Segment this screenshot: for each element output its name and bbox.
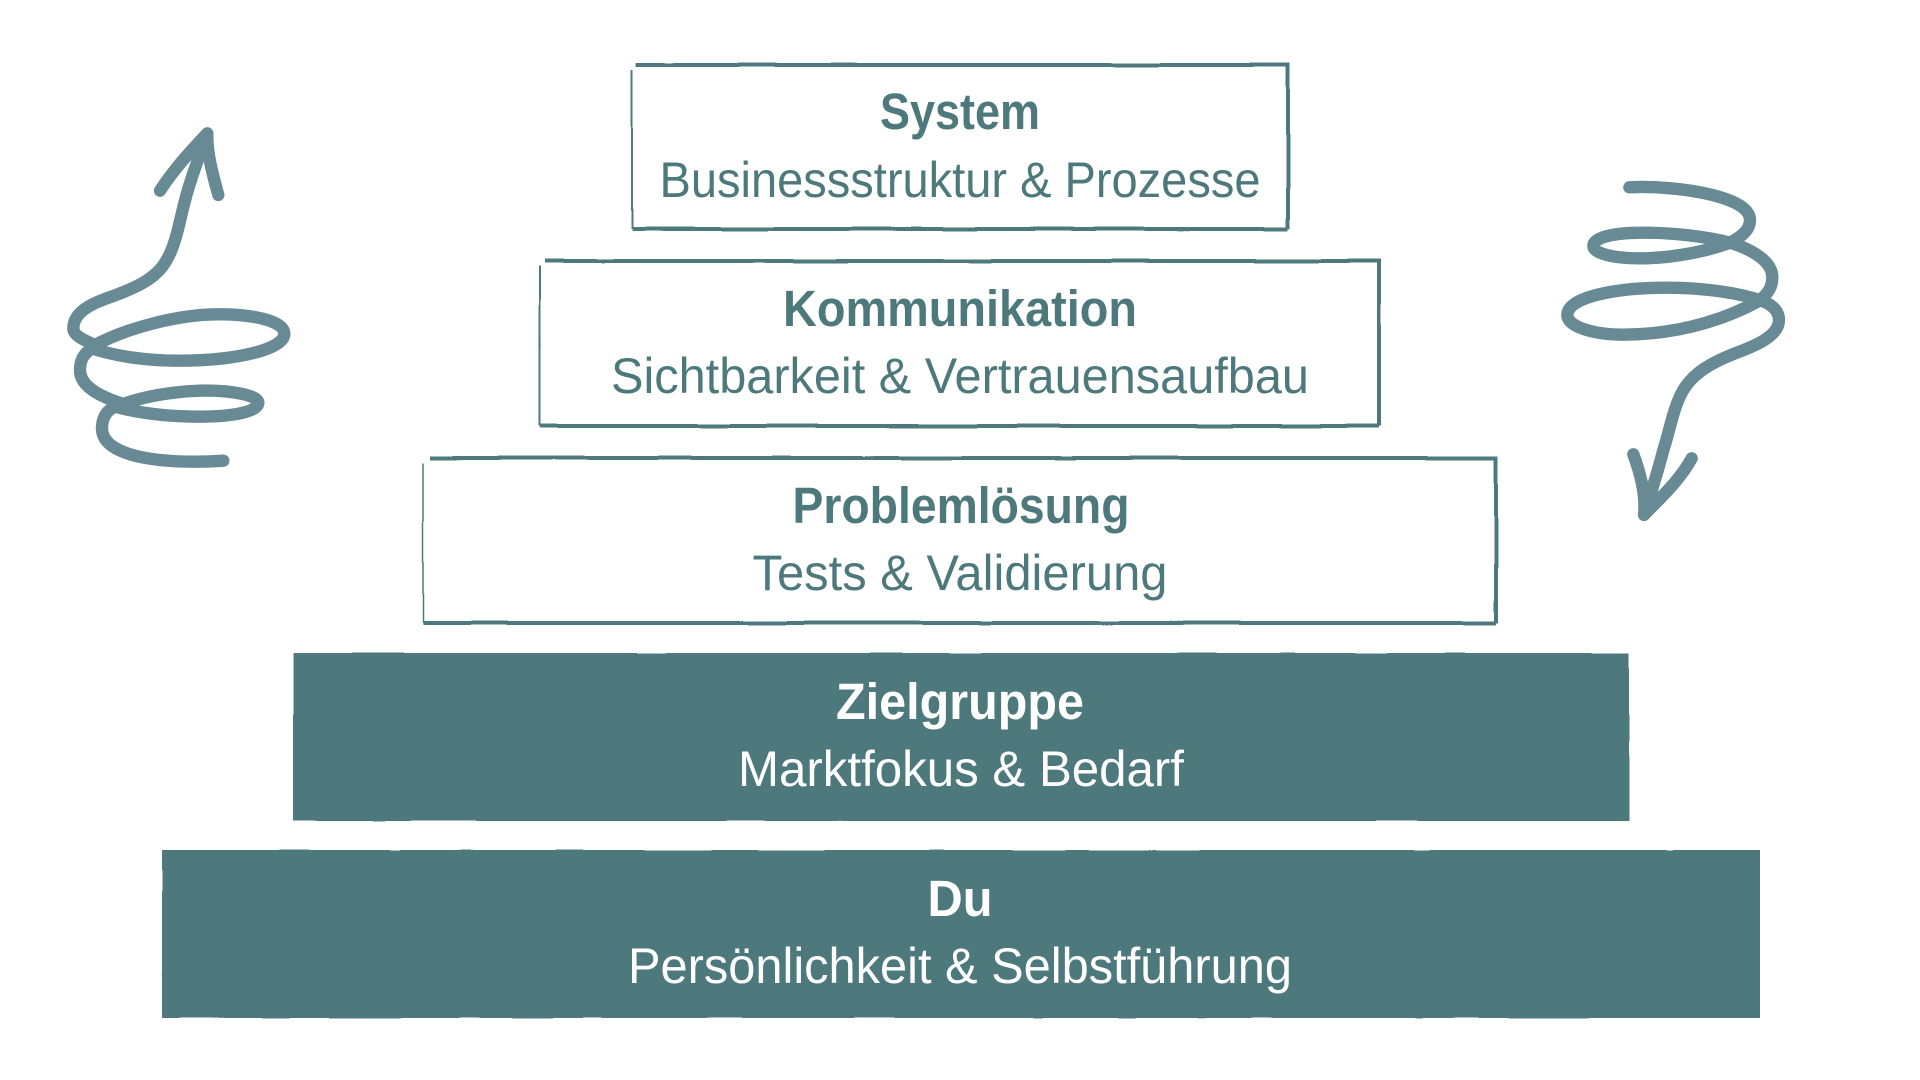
icon: spiral arrow up (73, 133, 284, 462)
heading: Zielgruppe: Zielgruppe (836, 673, 1084, 730)
filled box: Du (162, 850, 1760, 1018)
icon: spiral arrow down (1567, 187, 1779, 515)
box outline: Problemlösung (423, 458, 1496, 623)
heading: System: System (880, 83, 1040, 140)
subtitle: Sichtbarkeit & Vertrauensaufbau: Sichtbarkeit & Vertrauensaufbau (611, 348, 1309, 404)
subtitle: Businessstruktur & Prozesse: Businessstruktur & Prozesse (660, 152, 1260, 208)
subtitle: Tests & Validierung: Tests & Validierung (752, 545, 1168, 601)
tier: Kommunikation (540, 261, 1379, 426)
heading: Problemlösung: Problemlösung (792, 477, 1130, 534)
tier: Zielgruppe (293, 653, 1629, 821)
tier: Du (162, 850, 1760, 1018)
box outline: Kommunikation (540, 261, 1379, 426)
heading: Kommunikation: Kommunikation (783, 280, 1137, 337)
tier: System (632, 65, 1288, 229)
heading: Du: Du (928, 870, 992, 927)
subtitle: Marktfokus & Bedarf: Marktfokus & Bedarf (738, 741, 1184, 797)
tier: Problemlösung (423, 458, 1496, 623)
subtitle: Persönlichkeit & Selbstführung: Persönlichkeit & Selbstführung (628, 938, 1292, 994)
filled box: Zielgruppe (293, 653, 1629, 821)
box outline: System (632, 65, 1288, 229)
